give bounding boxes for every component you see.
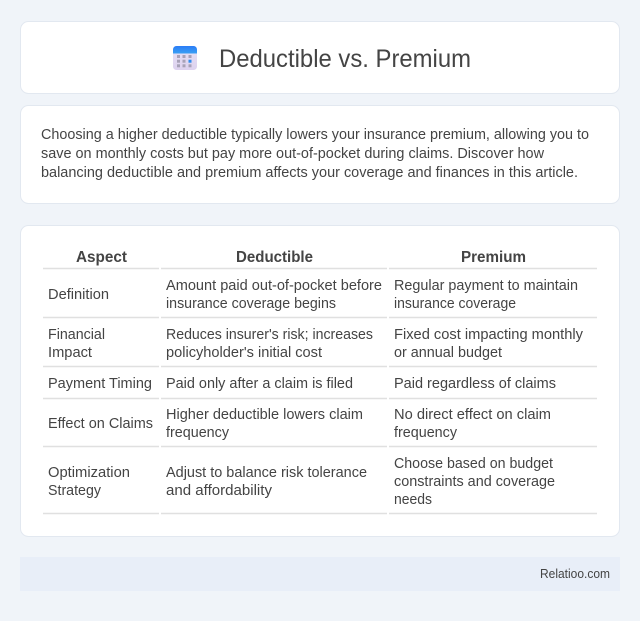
row: financial impact: or annual budget [394, 345, 502, 361]
intro paragraph [41, 127, 589, 181]
row: payment timing: Paid regardless of claims [394, 376, 556, 392]
row: financial impact: policyholder's initial cost [166, 345, 322, 361]
intro paragraph: balancing deductible and premium affects your coverage and finances in this article. [41, 165, 578, 181]
row: definition: insurance coverage [394, 296, 516, 312]
footer: Relatioo.com [540, 567, 610, 581]
row: optimization strategy: Choose based on budget [394, 456, 553, 472]
panel: comparison table [20, 226, 620, 536]
row: optimization strategy: Strategy [48, 483, 102, 499]
row: payment timing: Payment Timing [48, 376, 152, 392]
panel: intro text [20, 106, 620, 204]
row: effect on claims [48, 407, 551, 441]
table header: Premium [461, 249, 526, 266]
row: definition: insurance coverage begins [166, 296, 336, 312]
row: financial impact [48, 327, 584, 361]
row: optimization strategy [48, 456, 555, 508]
table header: Aspect [76, 249, 128, 266]
row: financial impact: Impact [48, 345, 92, 361]
intro paragraph: Choosing a higher deductible typically lowers your insurance premium, allowing you to [41, 127, 589, 143]
row: optimization strategy: Optimization [48, 465, 130, 481]
row: payment timing: Paid only after a claim is filed [166, 376, 353, 392]
row: definition: Regular payment to maintain [394, 278, 578, 294]
row: effect on claims: No direct effect on claim [394, 407, 551, 423]
row: optimization strategy: needs [394, 492, 432, 508]
title: Deductible vs. Premium [219, 45, 471, 73]
row: optimization strategy: constraints and coverage [394, 474, 555, 490]
icon: calendar [173, 46, 197, 70]
row: definition: Amount paid out-of-pocket before [166, 278, 382, 294]
table header: Deductible [236, 249, 313, 266]
row: effect on claims: Effect on Claims [48, 416, 153, 432]
intro paragraph: save on monthly costs but pay more out-of-pocket during claims. Discover how [41, 146, 544, 162]
row: optimization strategy: Adjust to balance risk tolerance [166, 465, 367, 481]
table header [76, 249, 526, 266]
panel: title card [20, 22, 620, 94]
row: definition [48, 278, 578, 312]
row: effect on claims: frequency [166, 425, 230, 441]
row: payment timing [48, 376, 556, 392]
row: effect on claims: frequency [394, 425, 458, 441]
footer [20, 557, 620, 591]
row: financial impact: Fixed cost impacting monthly [394, 327, 584, 343]
row: effect on claims: Higher deductible lowers claim [166, 407, 363, 423]
row: optimization strategy: and affordability [166, 483, 273, 499]
row: financial impact: Financial [48, 327, 105, 343]
row: definition: Definition [48, 287, 109, 303]
row: financial impact: Reduces insurer's risk; increases [166, 327, 373, 343]
